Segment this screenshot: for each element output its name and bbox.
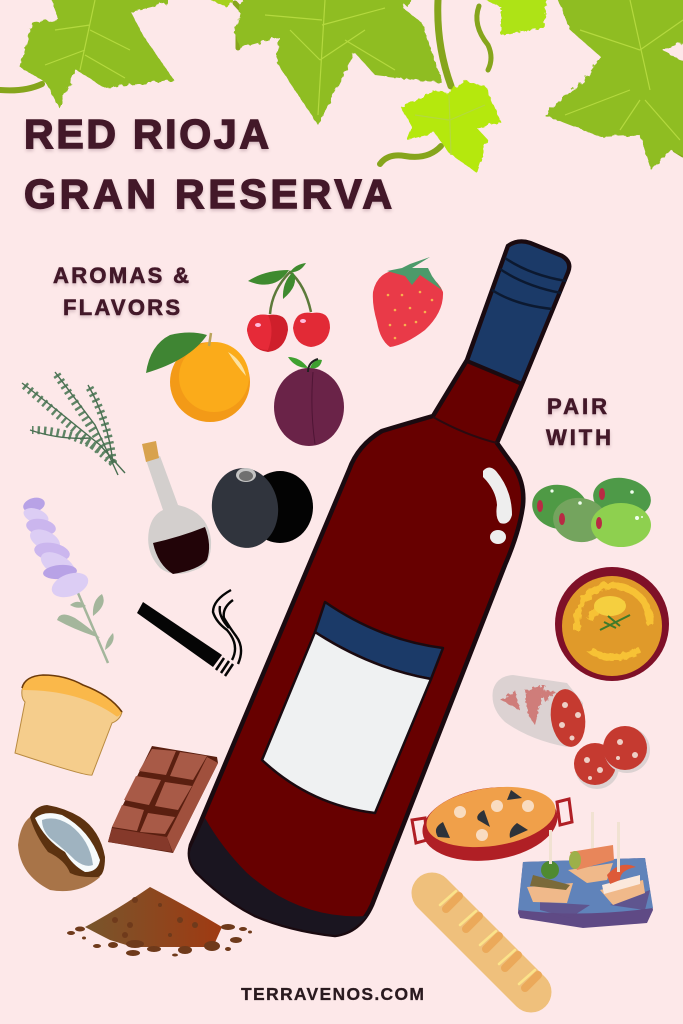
icon: chorizo	[492, 675, 650, 789]
icon: green olives	[528, 474, 654, 547]
icon: paella	[412, 779, 572, 869]
icon: lavender	[21, 495, 114, 663]
icon: tortilla	[555, 567, 669, 681]
icon: coconut	[18, 805, 105, 891]
icon: cherries	[247, 263, 330, 352]
leaf: right	[544, 0, 683, 170]
bottle base	[190, 818, 367, 935]
icon: cigarette and smoke	[137, 590, 241, 676]
icon: rosemary	[22, 372, 125, 475]
bottle highlight	[483, 468, 512, 524]
icon: black olives	[207, 464, 313, 552]
icon: brioche bread	[15, 675, 122, 775]
icon: baguette	[432, 891, 538, 992]
icon: spice powder pile	[67, 887, 252, 956]
toast: roll	[568, 863, 613, 883]
heading: pair with: PAIR	[547, 394, 607, 419]
icon: plum	[274, 357, 344, 446]
leaf veins	[45, 0, 683, 155]
title: GRAN RESERVA	[24, 171, 392, 217]
icon: balsamic vinegar	[142, 441, 211, 574]
heading: pair with	[546, 394, 611, 450]
icon: chocolate	[108, 746, 218, 853]
heading: pair with: WITH	[546, 425, 611, 450]
icon: orange	[146, 332, 250, 422]
grape leaves and vine	[0, 0, 683, 173]
bottle cap	[467, 242, 569, 384]
heading: aromas and flavors: FLAVORS	[63, 295, 180, 320]
bottle body	[190, 242, 569, 935]
wine bottle	[190, 242, 569, 935]
leaf: top left	[20, 0, 174, 108]
bottle label	[262, 602, 443, 813]
toast: shrimp	[600, 880, 645, 905]
website credit: TERRAVENOS.COM	[241, 984, 424, 1004]
leaf: top center	[235, 0, 442, 125]
toast: olive	[527, 883, 573, 903]
title	[24, 111, 392, 217]
vines	[0, 0, 683, 164]
heading: aromas and flavors: AROMAS &	[53, 263, 189, 288]
icon: strawberry	[373, 257, 443, 347]
heading: aromas and flavors	[53, 263, 189, 320]
icon: tapas plate	[518, 812, 653, 928]
leaf: bright hanging	[401, 80, 501, 173]
title: RED RIOJA	[24, 111, 269, 157]
leaf: small top	[200, 0, 237, 7]
